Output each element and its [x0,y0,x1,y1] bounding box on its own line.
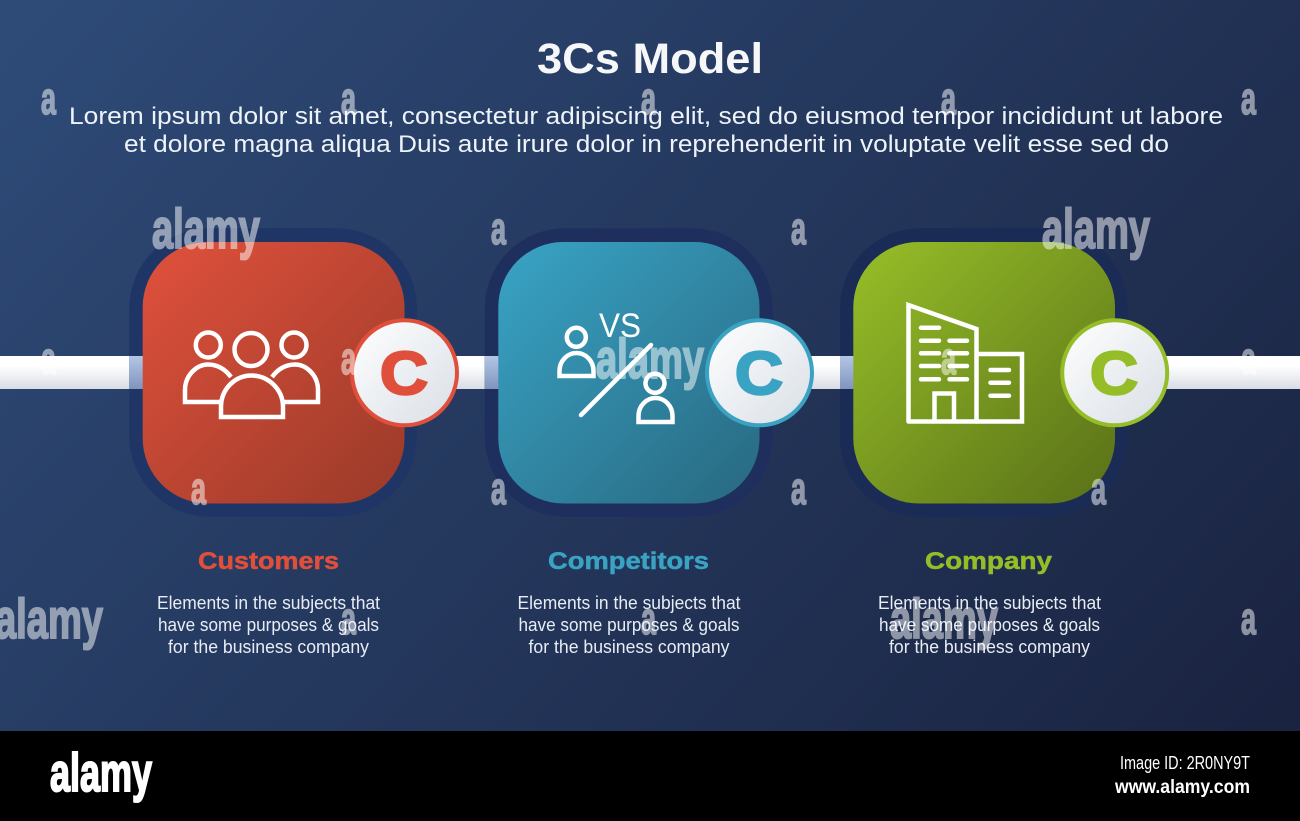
watermarks: alamy [1042,197,1150,260]
customers square [143,242,404,504]
panel: customers [129,228,457,517]
image id: Image ID: 2R0NY9T [1120,753,1250,773]
watermarks: a [41,333,57,384]
timeline bar [0,356,1300,389]
watermarks: a [941,333,957,384]
watermarks: a [191,463,207,514]
watermarks: a [341,73,357,124]
watermarks: a [1241,73,1257,124]
company C badge: C [1090,340,1138,407]
company outer frame [840,228,1128,517]
description: competitors: Elements in the subjects that [518,593,740,613]
intro text: et dolore magna aliqua Duis aute irure dolor in reprehenderit in voluptate velit esse sed do [124,131,1169,158]
panel: competitors [485,228,812,517]
competitors bar tint [485,356,499,389]
footer strip [0,731,1300,821]
watermarks: a [341,593,357,644]
description: company: for the business company [889,637,1090,657]
description: competitors: for the business company [528,637,730,657]
watermarks: a [491,463,507,514]
intro text: Lorem ipsum dolor sit amet, consectetur adipiscing elit, sed do eiusmod tempor incididunt ut labore [69,103,1223,130]
competitors square [498,242,760,504]
customers bar tint [129,356,143,389]
competitors C badge [707,320,812,425]
competitors C badge: C [735,340,783,407]
company square [853,242,1115,504]
description: company: have some purposes & goals [879,615,1100,635]
watermarks: a [791,463,807,514]
watermarks: a [41,73,57,124]
description: company: Elements in the subjects that [878,593,1101,613]
watermarks [0,73,1257,650]
website: www.alamy.com [1114,777,1250,798]
intro text [69,103,1223,158]
watermarks: a [641,73,657,124]
description: customers [157,593,380,657]
title: 3Cs Model [537,35,763,83]
heading: competitors: Competitors [548,548,709,575]
heading: customers: Customers [198,548,339,575]
description: customers: for the business company [168,637,369,657]
icon: person versus person [560,307,672,422]
customers C badge [352,320,457,425]
icon: person versus person: VS [599,307,641,345]
icon: people group [185,332,318,417]
watermarks: a [641,593,657,644]
icon: office buildings [908,305,1022,422]
watermarks: alamy [890,587,998,650]
description: competitors [518,593,740,657]
description: customers: have some purposes & goals [158,615,379,635]
watermarks: a [1241,593,1257,644]
company bar tint [840,356,854,389]
description: competitors: have some purposes & goals [518,615,740,635]
watermarks: a [791,203,807,254]
competitors outer frame [485,228,773,517]
panel: company [840,228,1167,517]
watermarks: a [941,73,957,124]
watermarks: a [491,203,507,254]
heading: company: Company [925,548,1053,575]
watermarks: a [1241,333,1257,384]
watermarks: alamy [596,327,704,390]
footer logo: alamy [50,743,152,803]
watermarks: a [1091,463,1107,514]
watermarks: alamy [152,197,260,260]
watermarks: a [341,333,357,384]
company C badge [1062,320,1167,425]
customers outer frame [129,228,417,517]
description: company [878,593,1101,657]
description: customers: Elements in the subjects that [157,593,380,613]
customers C badge: C [380,340,428,407]
